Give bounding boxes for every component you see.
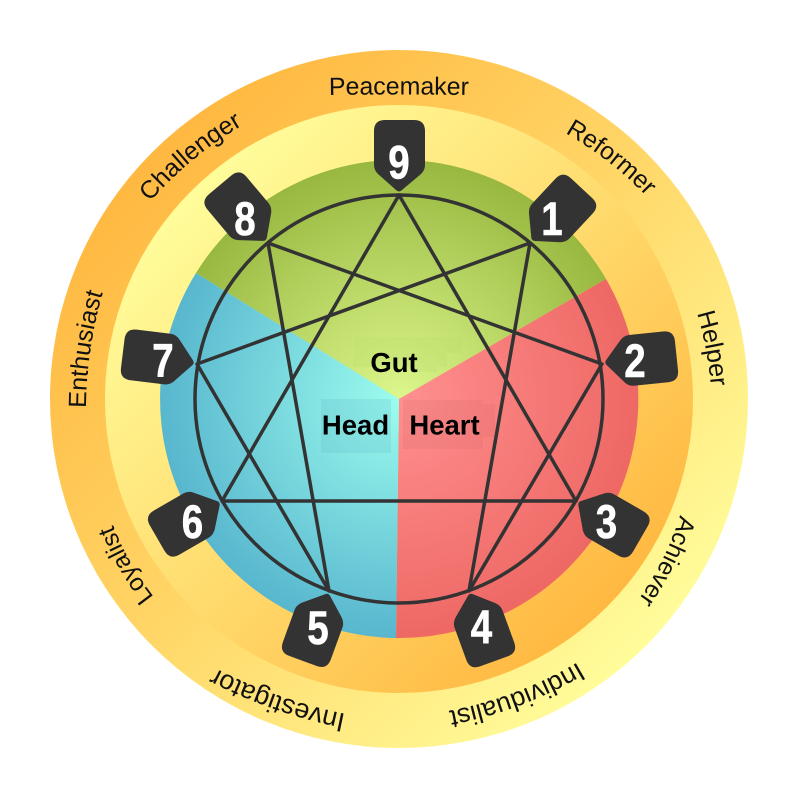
head label backdrop <box>321 399 391 453</box>
sector: gut <box>196 160 606 399</box>
badge 3: 3 <box>596 496 617 549</box>
badge 5 <box>279 585 352 670</box>
badge 7: 7 <box>152 335 174 388</box>
label: Enthusiast: Enthusiast <box>68 290 103 406</box>
badge 8 <box>201 169 286 256</box>
badge 1: 1 <box>541 193 563 246</box>
label: Helper: Helper <box>698 310 724 385</box>
hexad 1-4-2-8-5-7 <box>197 243 602 591</box>
triangle 9-3-6 <box>222 195 576 501</box>
badge 6: 6 <box>182 496 203 549</box>
badge 3 <box>566 481 653 561</box>
badge 2: 2 <box>624 335 646 388</box>
badge 9: 9 <box>388 137 410 189</box>
badge 2 <box>603 330 679 389</box>
label: Loyalist: Loyalist <box>99 525 153 606</box>
badge 7 <box>120 328 197 388</box>
label: Individualist: Individualist <box>448 663 585 728</box>
inner ring <box>105 105 693 693</box>
center label: Head: Head <box>322 410 389 440</box>
badge 9 <box>374 120 425 192</box>
label: Peacemaker: Peacemaker <box>330 76 469 96</box>
sector: head <box>160 273 399 638</box>
badge 4 <box>446 585 518 670</box>
badge 8: 8 <box>234 193 256 246</box>
heart label backdrop <box>403 400 495 449</box>
center label: Gut: Gut <box>370 347 418 378</box>
badge 5: 5 <box>307 602 329 655</box>
badge 1 <box>514 171 600 258</box>
sector: heart <box>396 279 638 638</box>
label: Reformer: Reformer <box>566 119 656 193</box>
label: Investigator: Investigator <box>209 670 344 732</box>
label: Challenger: Challenger <box>141 114 239 198</box>
center label: Heart: Heart <box>409 410 480 440</box>
outer ring <box>50 50 748 748</box>
badge 4: 4 <box>471 601 492 654</box>
badge 6 <box>144 480 232 560</box>
label: Achiever: Achiever <box>640 515 694 607</box>
enneagram circle <box>195 195 603 603</box>
gut label backdrop <box>353 337 462 372</box>
